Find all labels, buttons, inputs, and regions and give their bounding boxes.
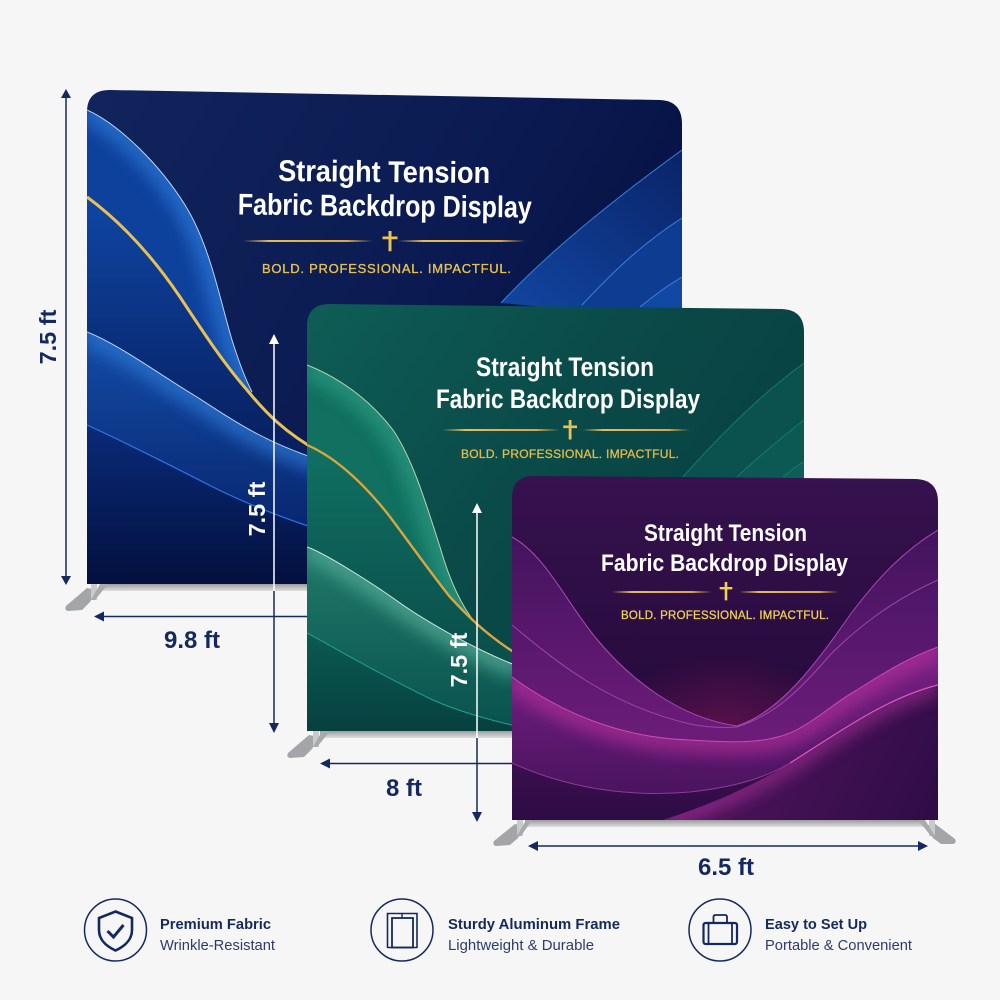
feature text: Easy to Set Up [765,917,867,933]
dimension: purple display width: 6.5 ft [698,854,754,881]
blue frame base and feet [65,584,340,611]
dimension: green display height [244,334,279,733]
feature: easy to set up: Portable & Convenient [765,937,913,954]
feature: easy to set up [689,899,913,961]
dimension: purple display height: 7.5 ft [446,632,472,687]
feature: premium fabric: Wrinkle-Resistant [160,937,276,954]
blue panel title: Straight Tension [278,155,490,190]
icon: carrying case [689,899,751,961]
feature: sturdy aluminum frame: Lightweight & Durable [448,937,594,954]
blue tagline: BOLD. PROFESSIONAL. IMPACTFUL. [262,261,511,276]
green tagline: BOLD. PROFESSIONAL. IMPACTFUL. [461,447,679,461]
purple panel title: Straight Tension [644,520,807,547]
dimension: blue display width: 9.8 ft [164,627,220,654]
blue gold divider with cross [243,231,526,251]
blue panel title: Fabric Backdrop Display [238,188,532,225]
purple panel title: Fabric Backdrop Display [601,550,848,577]
feature: premium fabric [84,899,276,961]
dimension: blue display height: 7.5 ft [35,309,61,364]
dimension: green display width: 8 ft [386,775,422,802]
purple panel title [601,520,848,577]
icon: shield with check [84,899,146,961]
display: purple 6.5 ft backdrop [493,476,956,846]
dimension: purple display height [446,503,482,822]
blue panel title [238,154,533,225]
feature text: Sturdy Aluminum Frame [448,917,620,933]
green panel title: Fabric Backdrop Display [436,384,700,414]
dimension: purple display width [528,841,928,881]
icon: frame [371,899,433,961]
green panel title: Straight Tension [476,352,654,382]
dimension: blue display height [35,89,71,585]
dimension: blue display width [94,612,307,654]
green fabric panel [307,304,804,731]
green frame base and feet [287,731,520,758]
feature: sturdy aluminum frame [371,899,620,961]
purple frame base and feet [493,820,956,846]
blue fabric panel [87,90,682,600]
display: blue 9.8 ft backdrop [65,90,682,611]
display: green 8 ft backdrop [287,304,804,758]
purple fabric panel [512,476,938,820]
feature text: Premium Fabric [160,917,271,933]
purple tagline: BOLD. PROFESSIONAL. IMPACTFUL. [621,610,829,622]
green panel title [436,352,700,414]
purple gold divider with cross [612,582,839,600]
green gold divider with cross [442,420,690,440]
dimension: green display height: 7.5 ft [244,481,270,536]
dimension: green display width [320,758,512,802]
